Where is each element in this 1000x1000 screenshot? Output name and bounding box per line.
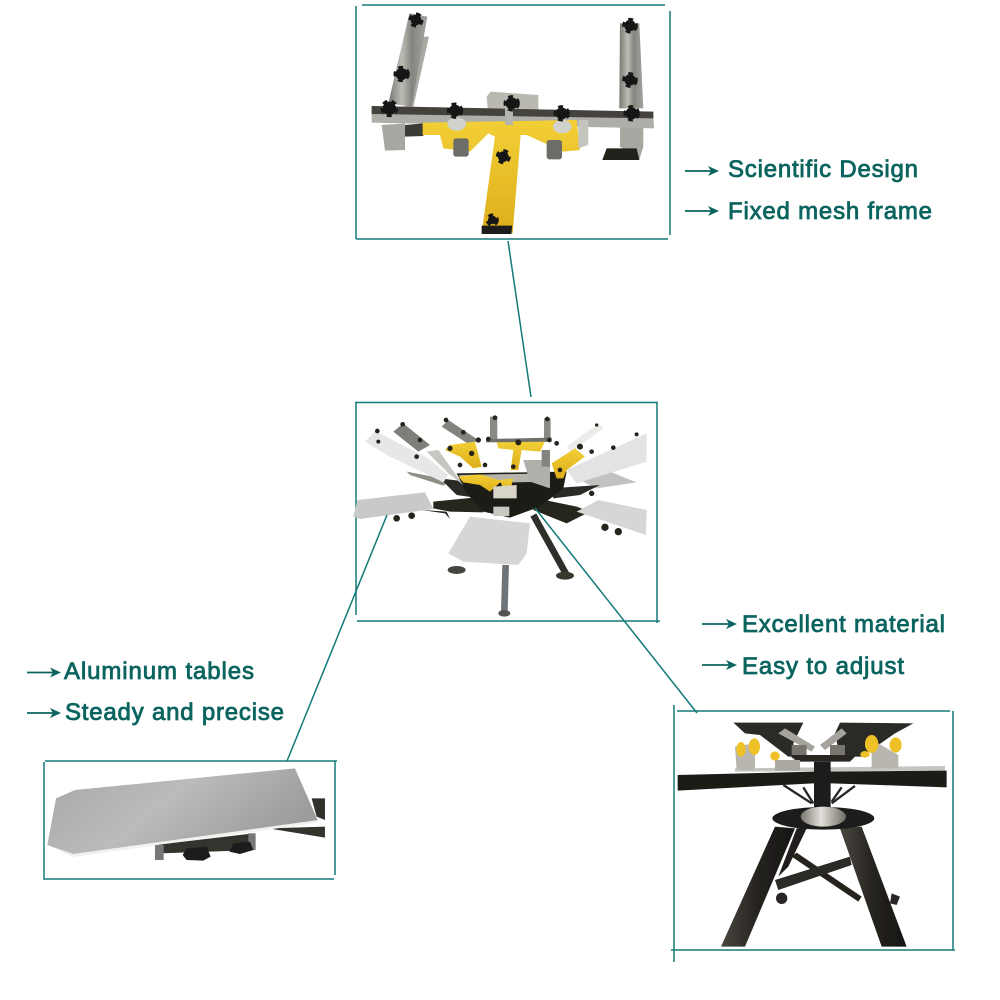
panel frame: base	[671, 705, 955, 962]
panel frame: table	[44, 761, 337, 880]
arrow: scientific design	[685, 166, 719, 176]
arrow: steady and precise	[27, 708, 61, 718]
panel frame: machine	[355, 402, 660, 623]
panel: aluminum table photo	[44, 761, 337, 880]
photo: rotary base and legs	[678, 723, 947, 947]
arrow: aluminum tables	[27, 668, 61, 678]
panel: complete machine photo	[353, 402, 660, 623]
connector line: machine to aluminum table	[287, 515, 387, 761]
label: easy to adjust: Easy to adjust	[742, 653, 904, 680]
photo: aluminum table	[47, 768, 325, 861]
connector line: top photo to machine	[508, 241, 531, 397]
label: excellent material: Excellent material	[742, 611, 945, 638]
feature list: mesh frame	[685, 156, 932, 225]
panel: machine base photo	[671, 705, 955, 962]
panel: mesh frame fixture photo	[356, 5, 670, 239]
arrow: fixed mesh frame	[685, 206, 719, 216]
arrow: easy to adjust	[702, 660, 737, 670]
label: fixed mesh frame: Fixed mesh frame	[728, 198, 932, 225]
label: scientific design: Scientific Design	[728, 156, 918, 183]
label: steady and precise: Steady and precise	[65, 699, 284, 726]
photo: fixed mesh frame fixture	[372, 13, 654, 234]
panel frame: top	[356, 5, 670, 239]
label: aluminum tables: Aluminum tables	[64, 658, 254, 685]
feature list: aluminum tables	[27, 658, 284, 726]
connector line: machine to base	[535, 508, 697, 713]
arrow: excellent material	[702, 619, 737, 629]
photo: six-colour printing press	[353, 415, 647, 617]
feature list: material	[702, 611, 945, 680]
